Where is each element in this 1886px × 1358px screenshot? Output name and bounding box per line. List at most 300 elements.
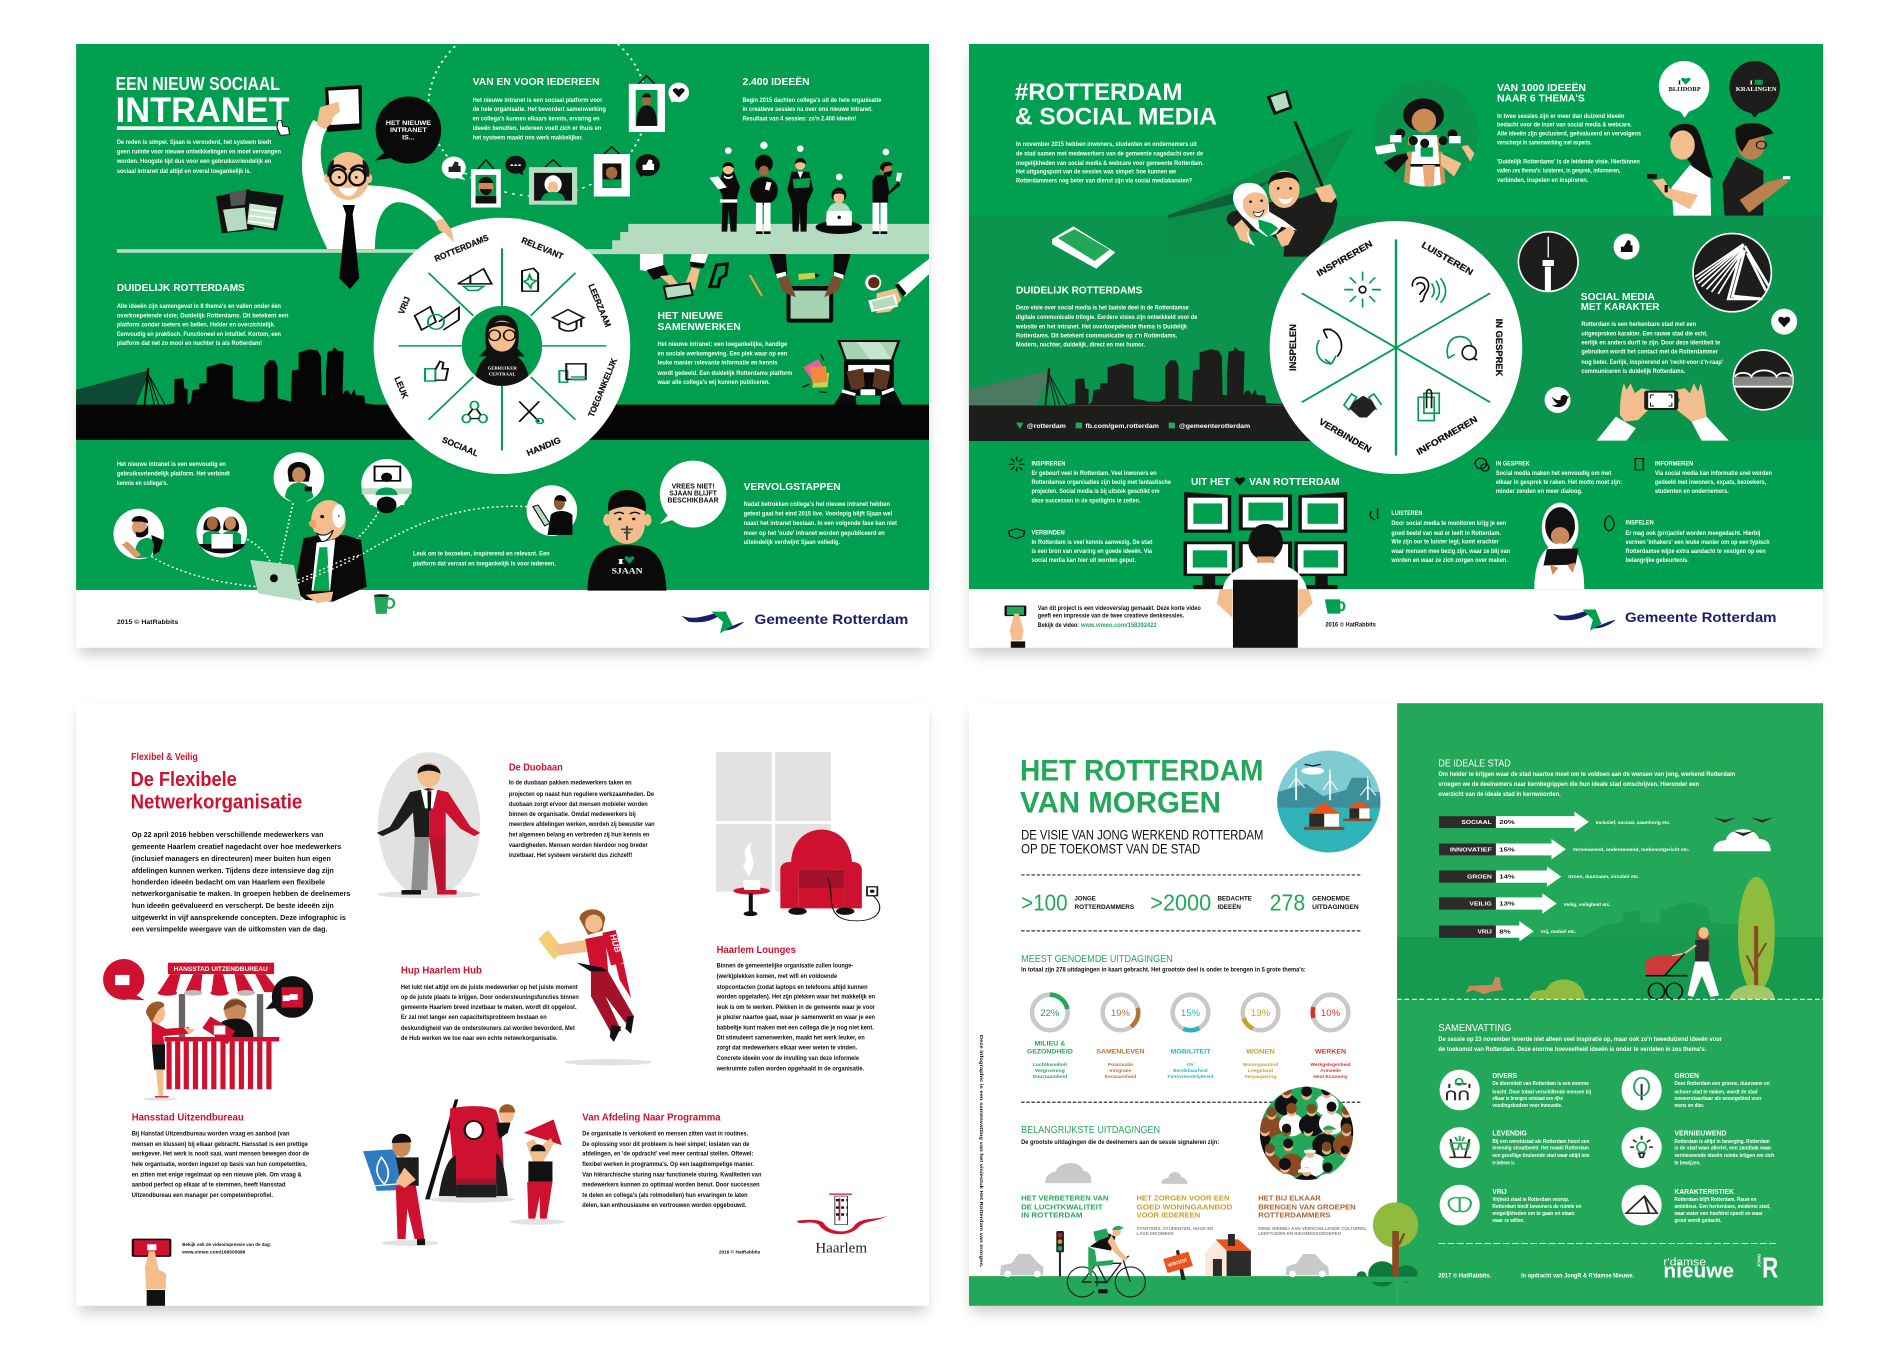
bottom green strip <box>969 1276 1397 1306</box>
text: de duobaan: De Duobaan <box>509 761 563 773</box>
wheel labels: VRIJ <box>396 295 412 316</box>
text: social media met karakter: communiceren is duidelijk Rotterdams. <box>1581 367 1685 374</box>
text: de ideale stad: vroegen we de deelnemers naar kernbegrippen die hun ideale stad omschrijven. Hieronder een <box>1438 780 1699 788</box>
text: vervolgstappen <box>744 481 897 545</box>
subtitle: OP DE TOEKOMST VAN DE STAD <box>1021 841 1200 857</box>
vertical note: Deze infographic is een samenvatting van het visiestuk Het Rotterdam van morgen. <box>978 1035 984 1268</box>
heading: uit het hart <box>1191 476 1340 488</box>
wheel centre label: GEBRUIKER <box>488 366 517 371</box>
text: inspelen: belangrijke gebeurtenis. <box>1626 556 1689 563</box>
heading: meest genoemde uitdagingen <box>1021 953 1306 973</box>
bar: innovatief: 15% <box>1499 848 1515 853</box>
text: 2.400 ideeen: Begin 2015 dachten collega's uit de hele organisatie <box>742 96 882 103</box>
text: informeren: gedeeld met inwoners, expats, bezoekers, <box>1655 478 1766 485</box>
text: duidelijk rotterdams <box>1015 285 1198 348</box>
darker band <box>969 216 1823 441</box>
text: de duobaan: In de duobaan pakken medewerkers taken en <box>509 779 632 786</box>
text: het nieuwe samenwerken: HET NIEUWE <box>658 310 723 321</box>
cars <box>1000 1254 1329 1275</box>
intro text: een versimpelde weergave van de uitkomsten van de dag. <box>132 925 327 933</box>
text: social media met karakter: gebruiken wordt het contact met de Rotterdammer <box>1581 348 1718 355</box>
challenge 2 <box>1137 1194 1233 1237</box>
bar: veilig <box>1439 893 1611 914</box>
donut: 22 percent: 22% <box>1040 1008 1060 1019</box>
woman <box>1233 183 1297 237</box>
text: in gesprek: elkaar in gesprek te raken. Het motto moet zijn: <box>1496 478 1622 485</box>
bottom characters <box>113 452 577 614</box>
bar: vrij: VRIJ <box>1477 930 1492 935</box>
duobaan figure <box>377 752 481 898</box>
text: het nieuwe samenwerken <box>657 310 793 385</box>
circle: erasmus bridge <box>1692 233 1772 313</box>
text: van en voor iedereen: VAN EN VOOR IEDEREEN <box>473 76 600 88</box>
text: het nieuwe samenwerken: wordt gedeeld. Een duidelijk Rotterdams platform <box>657 369 793 377</box>
donut: 22 percent <box>1032 995 1068 1030</box>
person in suit <box>787 158 813 232</box>
text: duidelijk rotterdams: Modern, nuchter, duidelijk, direct en met humor. <box>1016 341 1145 348</box>
theme labels: Luchtkwaliteit <box>1033 1063 1067 1068</box>
traffic light <box>1056 1231 1064 1276</box>
summary: karakteristiek: KARAKTERISTIEK <box>1674 1188 1734 1196</box>
text: in gesprek: Social media maken het eenvoudig om met <box>1496 469 1612 476</box>
text: de duobaan: duobaan zorgt ervoor dat mensen mobieler worden <box>509 800 648 808</box>
text: van afdeling naar programma: te delen en collega's (als rolmodellen) hun ervaringen te laten <box>582 1191 748 1199</box>
theme labels: GEZONDHEID <box>1027 1048 1073 1055</box>
text: vervolgstappen: uiteindelijk verdwijnt Sjaan volledig. <box>744 538 840 545</box>
text: in gesprek: IN GESPREK <box>1496 460 1530 467</box>
bar: innovatief: INNOVATIEF <box>1450 848 1492 853</box>
title: Flexibel & Veilig <box>131 751 198 762</box>
text: van 1000 ideeen <box>1497 81 1641 184</box>
jetpack hub character <box>538 909 652 1066</box>
summary: vernieuwend: te bewijzen. <box>1674 1161 1701 1166</box>
summary: divers: DIVERS <box>1492 1071 1517 1079</box>
cursor <box>277 121 290 135</box>
intro text: gemeente Haarlem creatief nagedacht over hoe medewerkers <box>132 842 341 850</box>
dotted connections <box>151 503 527 587</box>
intro text: honderden ideeën bedacht om van Haarlem een flexibele <box>132 878 325 886</box>
uitzendbureau stall <box>103 959 313 1101</box>
summary: vernieuwend: VERNIEUWEND <box>1674 1129 1727 1137</box>
text: duidelijk rotterdams: website en het intranet. Het overkoepelende thema is Duidelijk <box>1015 323 1188 330</box>
summary: karakteristiek: Rotterdam blijft Rotterdam. Rauw en <box>1674 1197 1756 1203</box>
summary: vernieuwend: Rotterdam is altijd in beweging. Rotterdam <box>1674 1139 1770 1145</box>
sjaan character <box>587 490 667 591</box>
people with phones <box>1647 123 1790 216</box>
speech bubble: het nieuwe intranet: HET NIEUWE <box>386 119 431 127</box>
speech bubbles: bijdorp and kralingen: I <box>1678 79 1681 86</box>
challenge 2: HET ZORGEN VOOR EEN <box>1137 1194 1230 1202</box>
social handles: fb.com/gem.rotterdam <box>1085 422 1159 430</box>
wheel labels: INFORMEREN <box>1415 414 1479 457</box>
skyline silhouette <box>1581 902 1745 937</box>
right green column <box>1397 703 1823 1306</box>
summary: vrij: VRIJ <box>1492 1188 1507 1196</box>
text: haarlem lounges: Dit stimuleert samenwerken, maakt het werk leuker, en <box>717 1034 865 1041</box>
backdrop triangles <box>1168 127 1355 255</box>
bar: sociaal: Inclusief, sociaal, saamhorig etc. <box>1596 821 1671 826</box>
selfie stick <box>1295 122 1323 188</box>
theme labels: Vergroening <box>1035 1069 1065 1074</box>
title <box>131 751 302 813</box>
summary: vernieuwend <box>1674 1129 1774 1166</box>
credit: 2016 © HatRabbits <box>1325 621 1376 628</box>
dotted circle <box>428 44 644 197</box>
summary: vernieuwend: vernieuwende ideeën ruimte krijgen om zich <box>1674 1153 1774 1159</box>
bar: veilig: VEILIG <box>1469 901 1492 907</box>
landmark and social circles <box>1518 231 1797 441</box>
text: luisteren: Wie zijn oor te luister legt, komt erachter <box>1391 538 1499 545</box>
wheel labels: RELEVANT <box>520 235 566 262</box>
text: duidelijk rotterdams: digitale communicatie trilogie. Eerdere visies zijn ontwikkeld voor de <box>1016 313 1198 321</box>
text: luisteren: Door social media te monitoren krijg je een <box>1391 519 1506 527</box>
text: leuk om te bezoeken <box>413 550 556 567</box>
speech bubble: het nieuwe intranet <box>375 97 441 163</box>
wheel labels <box>1288 239 1504 457</box>
team on platform <box>709 142 902 234</box>
bar: sociaal: 20% <box>1499 820 1515 826</box>
text: van 1000 ideeen: NAAR 6 THEMA'S <box>1497 92 1585 104</box>
wheel icons <box>1317 272 1477 421</box>
intro text: In november 2015 hebben inwoners, studenten en ondernemers uit <box>1016 140 1197 148</box>
summary: divers: voedingsbodem voor innovatie. <box>1492 1103 1563 1109</box>
logo: gemeente rotterdam: Gemeente Rotterdam <box>755 612 908 627</box>
theme labels: Verpaupering <box>1244 1075 1277 1080</box>
text: luisteren: waar mensen mee bezig zijn, waar ze blij van <box>1391 547 1510 554</box>
summary: karakteristiek: groot wordt gedacht. <box>1674 1218 1722 1223</box>
theme labels: Bereikbaarheid <box>1173 1069 1208 1074</box>
bar: groen: Groen, duurzaam, circulair etc. <box>1568 875 1640 879</box>
text: duidelijk rotterdams: platform dat net zo mooi en nuchter is als Rotterdam! <box>117 339 262 347</box>
intro text <box>116 138 281 174</box>
circle: euromast <box>1518 231 1579 292</box>
text: social media met karakter: Rotterdam is een herkenbare stad met een <box>1581 320 1696 328</box>
text: van en voor iedereen: ideeën benutten. Iedereen voelt zich er thuis en <box>473 124 601 132</box>
text: verbinden: is een bron van ervaring en goede ideeën. Via <box>1031 547 1153 554</box>
key figure: 278: GENOEMDE <box>1312 895 1350 902</box>
donut: 13 percent <box>1237 989 1284 1036</box>
for sale sign <box>1163 1250 1193 1280</box>
wheel labels <box>392 232 619 459</box>
wheel labels: VERBINDEN <box>1317 416 1373 455</box>
text: inspelen <box>1626 519 1770 563</box>
text: de ideale stad: overzicht van de ideale stad in kernwoorden. <box>1438 790 1561 798</box>
text: social media met karakter <box>1581 291 1723 374</box>
text: duidelijk rotterdams: Alle ideeën zijn samengevat in 8 thema's en vallen onder één <box>117 302 281 310</box>
text: vervolgstappen: VERVOLGSTAPPEN <box>744 481 841 492</box>
icon: coffee mug <box>1325 599 1344 614</box>
heading: uit het hart: VAN ROTTERDAM <box>1249 476 1340 488</box>
text: hup haarlem hub: Er zal niet langer een capaciteitsprobleem bestaan en <box>401 1013 547 1021</box>
logo: gemeente rotterdam <box>681 612 908 633</box>
dashed footer divider <box>1438 1242 1778 1244</box>
video note: Van dit project is een videoverslag gemaakt. Deze korte video <box>1038 604 1201 612</box>
platform and stairs <box>117 224 929 254</box>
theme labels: Woningaanbod <box>1243 1063 1279 1068</box>
text: de duobaan: projecten op naast hun reguliere werkzaamheden. De <box>509 790 655 797</box>
title: & SOCIAL MEDIA <box>1015 103 1217 130</box>
intro text: worden. Hoogste tijd dus voor een gebruiksvriendelijk en <box>116 157 271 165</box>
text: de ideale stad: Om helder te krijgen waar de stad naartoe moet om te voldoen aan de wensen van jong, werkend Rotterdam <box>1438 770 1735 777</box>
street scene <box>1000 1202 1422 1297</box>
text: verbinden: In Rotterdam is veel kennis aanwezig. De stad <box>1031 538 1153 545</box>
challenge 3: BRENGEN VAN GROEPEN <box>1258 1203 1356 1211</box>
text: verbinden: social media kan hier uit worden geput. <box>1031 556 1136 563</box>
text: in gesprek: minder zenden en meer dialoog. <box>1496 487 1583 494</box>
theme labels: Werkgelegenheid <box>1310 1063 1351 1068</box>
text: social media met karakter: SOCIAL MEDIA <box>1581 291 1655 302</box>
floppy disks <box>216 189 284 233</box>
bubble: vrees niet: BESCHIKBAAR <box>668 496 719 504</box>
dashed dividers <box>1021 875 1361 1102</box>
hands with phone <box>1597 383 1729 441</box>
text: haarlem lounges: zorgt dat medewerkers elkaar weer weten te vinden. <box>717 1044 857 1051</box>
collaboration hands under platform <box>640 254 930 323</box>
text: haarlem lounges: worden opgeladen). Het zijn plekken waar het makkelijk en <box>716 993 875 1000</box>
summary: karakteristiek: waar water een hoofdrol speelt en waar <box>1674 1211 1763 1217</box>
text: van 1000 ideeen: bedacht voor de inzet van social media & webcare. <box>1497 121 1632 128</box>
credit: 2015 © HatRabbits <box>117 618 178 625</box>
credit: 2017 © HatRabbits. <box>1438 1272 1491 1279</box>
woman with vr and tablet <box>1534 503 1584 589</box>
intro text: De reden is simpel. Sjaan is verouderd, het systeem biedt <box>117 138 272 146</box>
title: VAN MORGEN <box>1020 786 1221 819</box>
challenge 3: LEEFTIJDEN EN INKOMENSGROEPEN <box>1258 1232 1341 1237</box>
bar: vrij: Vrij, mobiel etc. <box>1541 930 1576 935</box>
summary: levendig: LEVENDIG <box>1492 1129 1527 1137</box>
text: hansstad uitzendbureau: werkgever. Het werk is nooit saai, want mensen bewegen door de <box>131 1150 310 1157</box>
text: haarlem lounges <box>716 944 875 1072</box>
speech bubbles: bijdorp and kralingen: KRALINGEN <box>1736 85 1777 92</box>
text: samenvatting: SAMENVATTING <box>1438 1022 1511 1034</box>
text: hup haarlem hub: gemeente Haarlem breed inzetbaar te maken, wordt dit opgelost. <box>401 1003 577 1011</box>
skyline <box>954 347 1310 405</box>
key figure: 278: UITDAGINGEN <box>1312 903 1359 910</box>
donut: 10 percent <box>1308 990 1353 1035</box>
small section icons <box>1370 458 1643 531</box>
heading: uit het hart: UIT HET <box>1191 476 1231 488</box>
text: inspireren <box>1031 460 1171 504</box>
text: haarlem lounges: leuk is om te werken. Plekken in de gemeente waar je voor <box>717 1003 875 1010</box>
theme labels: Armoede <box>1320 1069 1341 1074</box>
dotted line over suit <box>298 555 361 583</box>
intro text: geen ruimte voor nieuwe ontwikkelingen en moet vervangen <box>117 148 281 155</box>
video note: www.vimeo.com/166505686 <box>181 1250 246 1255</box>
donut: 13 percent: 13% <box>1251 1008 1271 1019</box>
text: inspelen: Er mag ook (pro)actief worden meegedacht. Hierbij <box>1626 529 1760 536</box>
text: duidelijk rotterdams: overkoepelende visie; Duidelijk Rotterdams. Dit betekent een <box>117 312 289 319</box>
house <box>1205 1234 1251 1276</box>
challenge 1: IN ROTTERDAM <box>1021 1211 1083 1219</box>
intro text: Op 22 april 2016 hebben verschillende medewerkers van <box>132 830 323 839</box>
text: inspireren: INSPIREREN <box>1031 460 1066 467</box>
bar: veilig: Veilig, veiligheid etc. <box>1564 903 1611 908</box>
summary: vrij <box>1492 1188 1581 1223</box>
selfie couple with backdrop <box>1168 90 1355 257</box>
man <box>1227 187 1338 257</box>
man with laptop <box>250 500 367 603</box>
text: hansstad uitzendbureau: aanbod perfect op elkaar af te stemmen, heeft Hansstad <box>132 1181 286 1188</box>
wheel centre character <box>474 315 530 389</box>
wheel labels: IN GESPREK <box>1494 319 1504 377</box>
credit: In opdracht van JongR & R'damse Nieuwe. <box>1521 1272 1634 1279</box>
text: 2.400 ideeen: in creatieve sessies na over ons nieuwe intranet. <box>742 105 873 112</box>
donut: 15 percent: 15% <box>1181 1008 1201 1019</box>
text: het nieuwe samenwerken: SAMENWERKEN <box>658 321 741 332</box>
monitor wall <box>1184 492 1347 589</box>
text: de duobaan: inzetbaar. Het systeem versterkt dus zichzelf! <box>509 851 632 859</box>
text: nieuwe intranet eenvoudig: kennis en collega's. <box>117 479 168 487</box>
subtitle: DE VISIE VAN JONG WERKEND ROTTERDAM <box>1021 827 1263 843</box>
bar: sociaal: SOCIAAL <box>1461 820 1492 826</box>
text: nieuwe intranet eenvoudig: Het nieuwe intranet is een eenvoudig en <box>117 460 226 468</box>
theme labels: Fietsvriendelijkheid <box>1168 1075 1214 1080</box>
heading: belangrijkste uitdagingen: BELANGRIJKSTE UITDAGINGEN <box>1021 1124 1160 1135</box>
text: 2.400 ideeen: 2.400 IDEEËN <box>742 75 810 88</box>
theme labels: WERKEN <box>1315 1048 1346 1055</box>
subtitle <box>1021 827 1263 857</box>
text: nieuwe intranet eenvoudig: gebruiksvriendelijk platform. Het verbindt <box>117 470 230 477</box>
theme labels: Eenzaamheid <box>1105 1075 1137 1080</box>
text: de duobaan <box>509 761 655 859</box>
text: vervolgstappen: Nadat betrokken collega's het nieuwe intranet hebben <box>744 500 890 508</box>
text: duidelijk rotterdams: Deze visie over social media is het laatste deel in de Rotterdamse <box>1016 304 1189 311</box>
text: nieuwe intranet eenvoudig <box>117 460 230 487</box>
summary: divers <box>1492 1071 1591 1109</box>
summary: groen: GROEN <box>1674 1071 1699 1079</box>
text: haarlem lounges: Concrete ideeën voor de invulling van deze informele <box>717 1054 859 1061</box>
title: EEN NIEUW SOCIAAL <box>116 73 280 94</box>
video note: Bekijk de video: <box>1038 621 1079 629</box>
bar: groen: GROEN <box>1467 875 1492 880</box>
panel: rotterdam and social media infographic <box>954 44 1823 648</box>
challenge 2: GOED WONINGAANBOD <box>1137 1203 1233 1211</box>
credit <box>1438 1272 1634 1279</box>
cyclist <box>1067 1226 1145 1297</box>
logo: jong r: JONG <box>1756 1254 1762 1268</box>
text: social media met karakter: eerlijk en anders durft te zijn. Door deze identiteit te <box>1581 339 1721 346</box>
heading: meest genoemde uitdagingen: In totaal zijn 278 uitdagingen in kaart gebracht. Het grootste deel is onder te brengen in 5 grote thema's: <box>1021 966 1306 973</box>
speech bubble: het nieuwe intranet: IS... <box>402 134 415 141</box>
panel: het rotterdam van morgen <box>969 703 1823 1306</box>
text: van en voor iedereen: en collega's kunnen elkaars kennis, ervaring en <box>473 115 600 122</box>
bar: veilig: 13% <box>1499 901 1515 907</box>
wheel centre label <box>488 366 517 376</box>
title: INTRANET <box>116 91 290 130</box>
summary: vrij: Vrijheid staat in Rotterdam voorop. <box>1492 1197 1569 1203</box>
logo: gemeente rotterdam <box>1553 609 1777 631</box>
seated person with laptop <box>816 188 862 234</box>
wheel labels: LUISTEREN <box>1420 240 1475 277</box>
intro text: netwerkorganisatie te maken. In groepen hebben de deelnemers <box>132 890 350 898</box>
theme labels: Integratie <box>1110 1069 1132 1074</box>
wheel labels: ROTTERDAMS <box>433 232 490 264</box>
skyline and black band <box>63 347 962 440</box>
text: van afdeling naar programma: De oplossing voor dit probleem is heel simpel; loslaten van de <box>582 1140 750 1148</box>
text: haarlem lounges: babbeltje kunt maken met een collega die je nog niet kent. <box>717 1024 874 1031</box>
donut: 15 percent <box>1166 988 1215 1037</box>
person with phone <box>873 162 902 234</box>
speech bubbles: bijdorp and kralingen: I <box>1750 79 1753 86</box>
speech bubbles: bijdorp and kralingen: BLIJDORP <box>1669 85 1701 92</box>
summary: divers: kracht. Door totaal verschillende mensen bij <box>1492 1089 1591 1095</box>
text: hup haarlem hub: de Hub werken we toe naar een echte netwerkorganisatie. <box>401 1034 558 1041</box>
logo: jong r <box>1756 1252 1778 1284</box>
logo: gemeente rotterdam: Gemeente Rotterdam <box>1625 609 1777 625</box>
theme labels: Leegstand <box>1248 1069 1273 1074</box>
intro text: Rotterdammers nog beter van dienst zijn via social mediakanalen? <box>1016 177 1192 184</box>
sjaan character: I <box>617 558 625 566</box>
woman with pram <box>1646 927 1719 999</box>
text: duidelijk rotterdams: platform zonder toeters en bellen. Helder en overzichtelijk. <box>117 321 275 328</box>
text: van afdeling naar programma: Van hiërarchische sturing naar functionele sturing. Kwaliteiten van <box>582 1171 762 1178</box>
text: de ideale stad <box>1438 757 1735 798</box>
challenge 3: DENK HIERBIJ AAN VERSCHILLENDE CULTUREN, <box>1258 1227 1367 1232</box>
circle: heart <box>1771 309 1797 335</box>
video note: Bekijk ook de videoimpressie van de dag: <box>182 1243 271 1248</box>
jetpack hub character: HUB <box>608 934 623 954</box>
text: van 1000 ideeen: verscherpt in samenwerking met experts. <box>1497 139 1592 146</box>
text: informeren <box>1655 460 1772 494</box>
text: inspelen: vormen 'inhakers' een leuke manier om op een typisch <box>1626 538 1770 545</box>
challenge 2: LAGE INKOMENS <box>1137 1232 1174 1237</box>
theme labels <box>1027 1040 1351 1080</box>
coffee mug <box>374 594 394 614</box>
summary: vrij: mogelijkheden om te gaan en staan <box>1492 1211 1574 1217</box>
summary: karakteristiek: ambitieus. Een herkenbare, moderne stad, <box>1674 1204 1770 1210</box>
text: van en voor iedereen: het systeem maakt ons werk makkelijker. <box>473 134 583 141</box>
text: inspireren: Er gebeurt veel in Rotterdam. Veel inwoners en <box>1031 469 1157 476</box>
key figure: 278 <box>1270 890 1359 915</box>
text: van afdeling naar programma: De organisatie is verkokerd en mensen zitten vast in routines. <box>582 1130 748 1137</box>
summary: levendig: te beleven is. <box>1492 1161 1515 1166</box>
bar: groen <box>1439 866 1640 887</box>
donut: 19 percent <box>1099 991 1142 1034</box>
credit: 2016 © HatRabbits <box>719 1249 761 1255</box>
key figure: 100: ROTTERDAMMERS <box>1075 903 1134 910</box>
video note <box>132 1239 271 1306</box>
icon: phone on table <box>1052 226 1115 269</box>
text: vervolgstappen: naast het intranet bestaan. In een volgende fase kan niet <box>744 519 897 527</box>
heading: meest genoemde uitdagingen: MEEST GENOEMDE UITDAGINGEN <box>1021 953 1173 964</box>
portrait: person at monitor <box>361 459 412 513</box>
bar: sociaal <box>1439 812 1671 832</box>
summary: levendig: een gezellige bruisende stad waar altijd iets <box>1492 1153 1590 1159</box>
bar: groen: 14% <box>1499 875 1515 880</box>
logo: jong r: R <box>1762 1252 1778 1284</box>
stall sign text: HANSSTAD UITZENDBUREAU <box>174 965 268 972</box>
text: de duobaan: het algemeen belang en verbreden zij hun kennis en <box>509 831 650 838</box>
text: samenvatting: de toekomst van Rotterdam. Deze enorme hoeveelheid ideeën is onder te verdelen in zes thema's: <box>1438 1045 1706 1052</box>
bubble: vrees niet: VREES NIET! <box>672 482 715 490</box>
text: vervolgstappen: meer op het 'oude' intranet worden gepubliceerd en <box>744 529 885 536</box>
theme labels: OV <box>1187 1063 1194 1068</box>
summary: divers: elkaar te brengen ontstaat een rijke <box>1492 1096 1563 1102</box>
intro text: de stad samen met medewerkers van de gemeente nagedacht over de <box>1016 150 1204 157</box>
text: hup haarlem hub: Het lukt niet altijd om de juiste medewerker op het juiste moment <box>401 983 578 991</box>
for sale sign: VERKOCHT <box>1167 1258 1188 1269</box>
text: verbinden: VERBINDEN <box>1031 529 1065 536</box>
text: hup haarlem hub: op de juiste plaats te krijgen. Door ondersteuningsfuncties binnen <box>401 993 579 1001</box>
cloud with birds <box>1713 817 1774 851</box>
text: luisteren <box>1391 510 1510 563</box>
rabbit <box>1465 977 1504 994</box>
text: haarlem lounges: Haarlem Lounges <box>717 944 796 955</box>
wheel <box>374 218 630 474</box>
text: van en voor iedereen: Het nieuwe intranet is een sociaal platform voor <box>473 96 602 103</box>
text: van afdeling naar programma: afdelingen, en 'de opdracht' veel meer centraal stellen. Oftewel: <box>582 1150 753 1157</box>
text: van 1000 ideeen: In twee sessies zijn er meer dan duizend ideeën <box>1497 112 1625 119</box>
